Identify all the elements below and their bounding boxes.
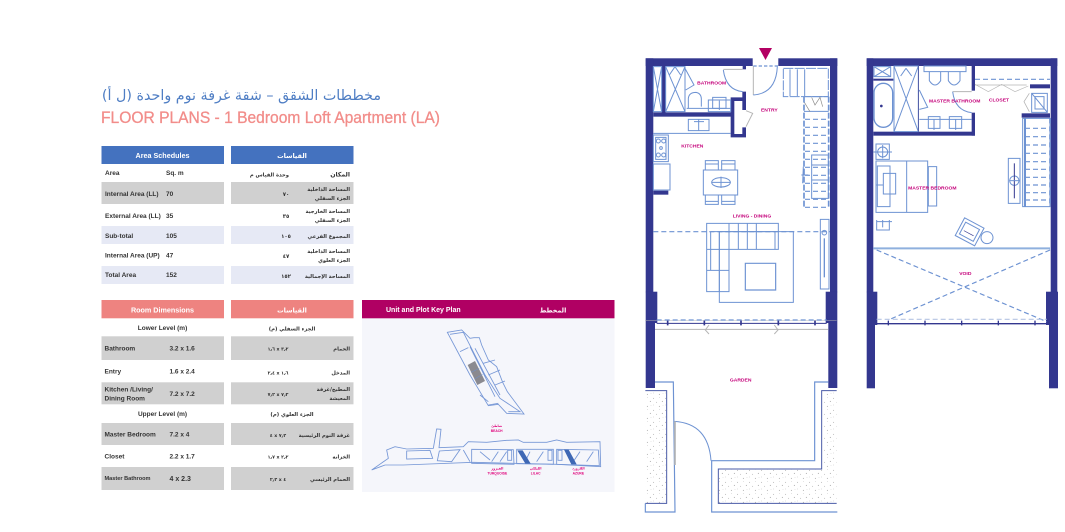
table: room dimensions Arabic: الجزء العلوي (م) — [270, 412, 314, 418]
table: room dimensions English: 2.2 x 1.7 — [170, 454, 195, 460]
table: room dimensions English: Dining Room — [104, 396, 145, 402]
table: room dimensions English: 4 x 2.3 — [170, 476, 191, 483]
table: area schedules Arabic: وحدة القياس م — [250, 172, 289, 178]
nightstand lower — [877, 220, 892, 230]
table header: room dimensions: Room Dimensions — [131, 306, 194, 314]
table: room dimensions English: Lower Level (m) — [138, 325, 187, 332]
master bedroom label: MASTER BEDROOM — [908, 186, 957, 192]
floor plan: lower level — [645, 48, 837, 512]
desk — [1008, 158, 1020, 203]
right planter — [718, 391, 837, 503]
sliding doors — [645, 320, 837, 334]
key plan: beach label: شاطئ — [491, 424, 502, 428]
table: room dimensions English: 3.2 x 1.6 — [170, 346, 195, 352]
entry label: ENTRY — [761, 108, 778, 114]
table: area schedules Arabic: المساحة الداخلية — [307, 249, 350, 255]
left planter — [645, 391, 667, 503]
table: area schedules English: 152 — [166, 272, 177, 279]
staircase lower — [783, 68, 829, 208]
table: room dimensions Arabic: ٧٫٢ x ٧٫٢ — [268, 392, 289, 398]
table: area schedules Arabic: ٧٠ — [283, 192, 289, 198]
key plan: tower block — [447, 330, 524, 414]
table: area schedules Arabic: ٣٥ — [283, 214, 289, 220]
title: English: FLOOR PLANS - 1 Bedroom Loft Apartment (LA) — [101, 108, 440, 127]
master bathroom — [873, 66, 975, 136]
table: area schedules Arabic: الجزء السفلي — [315, 196, 350, 202]
table: area schedules Arabic: ٤٧ — [283, 254, 290, 260]
table: area schedules Arabic: ١٠٥ — [281, 234, 291, 240]
table: room dimensions Arabic: المطبخ/غرفة — [317, 387, 350, 393]
master bed — [873, 144, 937, 212]
panel: unit and plot key plan: BEACH — [491, 429, 503, 433]
table: room dimensions Arabic: ٧٫٢ x ٤ — [270, 433, 286, 439]
closet fittings — [975, 79, 1050, 118]
bathroom and entry — [653, 66, 778, 195]
key plan header: Unit and Plot Key Plan — [386, 307, 461, 314]
table: area schedules English: External Area (LL) — [105, 213, 161, 220]
table: area schedules Arabic: المساحة الداخلية — [307, 187, 350, 193]
table: area schedules English: Sub-total — [105, 233, 133, 240]
key plan: cluster labels: الليلكي — [530, 467, 542, 471]
table: room dimensions Arabic: المدخل — [331, 370, 350, 376]
table: area schedules English: 47 — [166, 252, 174, 260]
table: area schedules English: 35 — [166, 213, 174, 220]
table: room dimensions Arabic: الخزانة — [332, 454, 350, 460]
key plan: site outline — [372, 429, 601, 470]
master bathroom label: MASTER BATHROOM — [929, 98, 980, 104]
table: room dimensions Arabic — [231, 300, 354, 490]
bathroom label: BATHROOM — [697, 81, 726, 87]
table: area schedules English: Sq. m — [166, 170, 184, 177]
table: room dimensions English: Kitchen /Living/ — [104, 386, 153, 394]
armchair and side table — [955, 218, 993, 246]
dining table — [703, 161, 738, 204]
table: room dimensions Arabic: الحمام — [333, 346, 350, 352]
table: room dimensions English: Upper Level (m) — [138, 411, 187, 418]
table: room dimensions English: Entry — [104, 368, 122, 376]
table: area schedules Arabic: الجزء السفلي — [315, 218, 350, 224]
void label: VOID — [959, 271, 972, 277]
upper level walls — [867, 58, 1058, 388]
table: area schedules Arabic: المساحة الإجمالية — [305, 274, 350, 280]
table: room dimensions English: 1.6 x 2.4 — [170, 368, 195, 376]
table header: room dimensions — [102, 300, 224, 318]
table: room dimensions Arabic: المعيشة — [329, 396, 350, 402]
media unit — [820, 219, 829, 289]
table: room dimensions Arabic: الحمام الرئيسي — [310, 477, 350, 483]
title: Arabic: مخططات الشقق – شقة غرفة نوم واحدة (ل أ) — [102, 86, 381, 104]
key plan: cluster labels: اللازورد — [572, 467, 585, 471]
table: area schedules Arabic: المكان — [330, 172, 350, 178]
table: room dimensions Arabic: ٢٫٢ x ١٫٧ — [268, 454, 289, 460]
balustrade line — [873, 245, 1050, 251]
table: room dimensions English: Master Bathroom — [104, 476, 151, 482]
table: area schedules English: Area — [105, 170, 120, 177]
garden boundary and gate — [645, 382, 837, 512]
lower level walls — [646, 58, 837, 388]
table: room dimensions Arabic: ١٫٦ x ٢٫٤ — [268, 370, 289, 376]
kitchen fittings — [653, 119, 731, 190]
table: area schedules Arabic: المجموع الفرعي — [307, 234, 350, 240]
staircase upper — [1023, 118, 1050, 207]
table: room dimensions Arabic: غرفة النوم الرئيسية — [299, 433, 350, 439]
table header: room dimensions Arabic — [231, 300, 354, 318]
table: area schedules English: 105 — [166, 233, 177, 240]
table: room dimensions English: Closet — [104, 454, 125, 460]
key plan header: المخطط — [540, 306, 566, 314]
closet label: CLOSET — [989, 97, 1009, 103]
icon: entry arrow — [759, 48, 772, 60]
table: room dimensions Arabic: ٤ x ٢٫٣ — [270, 477, 286, 483]
table: room dimensions English: Bathroom — [104, 346, 135, 352]
dashed void line — [653, 230, 830, 233]
table: area schedules Arabic: ١٥٢ — [281, 274, 292, 280]
table: area schedules English: Internal Area (UP) — [105, 252, 160, 260]
table: area schedules English: 70 — [166, 191, 174, 198]
table: room dimensions English: 7.2 x 4 — [170, 432, 190, 438]
table: area schedules English: Total Area — [105, 272, 136, 279]
table header: room dimensions Arabic: القياسات — [277, 306, 307, 314]
key plan: cluster labels: LILAC — [531, 471, 541, 475]
table: room dimensions Arabic: ٣٫٢ x ١٫٦ — [268, 346, 289, 352]
table header: area schedules: Area Schedules — [136, 151, 189, 160]
key plan: cluster labels: الفيروز — [490, 467, 503, 471]
sofa and rug — [707, 223, 793, 302]
table: area schedules Arabic — [231, 146, 354, 284]
living label: LIVING - DINING — [733, 214, 771, 220]
table: area schedules English — [102, 146, 224, 284]
table: area schedules Arabic: الجزء العلوي — [318, 258, 350, 264]
floor plan: upper level — [867, 58, 1058, 388]
panel: unit and plot key plan — [362, 300, 614, 492]
table header: area schedules Arabic: القياسات — [277, 152, 307, 160]
table: area schedules English: Internal Area (LL) — [105, 191, 159, 198]
table: room dimensions Arabic: الجزء السفلي (م) — [269, 326, 315, 332]
void cross — [877, 250, 1050, 322]
key plan: cluster labels: TURQUOISE — [487, 471, 508, 475]
table: room dimensions English: 7.2 x 7.2 — [170, 391, 195, 398]
table: room dimensions English: Master Bedroom — [104, 432, 156, 438]
key plan: cluster labels: AZURE — [573, 471, 585, 475]
garden label: GARDEN — [730, 378, 752, 384]
table: area schedules Arabic: المساحة الخارجية — [305, 209, 350, 215]
balcony window — [877, 319, 1047, 325]
key plan header — [362, 300, 614, 318]
table: room dimensions English — [102, 300, 224, 490]
key plan: cluster labels — [487, 467, 585, 475]
kitchen label: KITCHEN — [681, 143, 704, 149]
